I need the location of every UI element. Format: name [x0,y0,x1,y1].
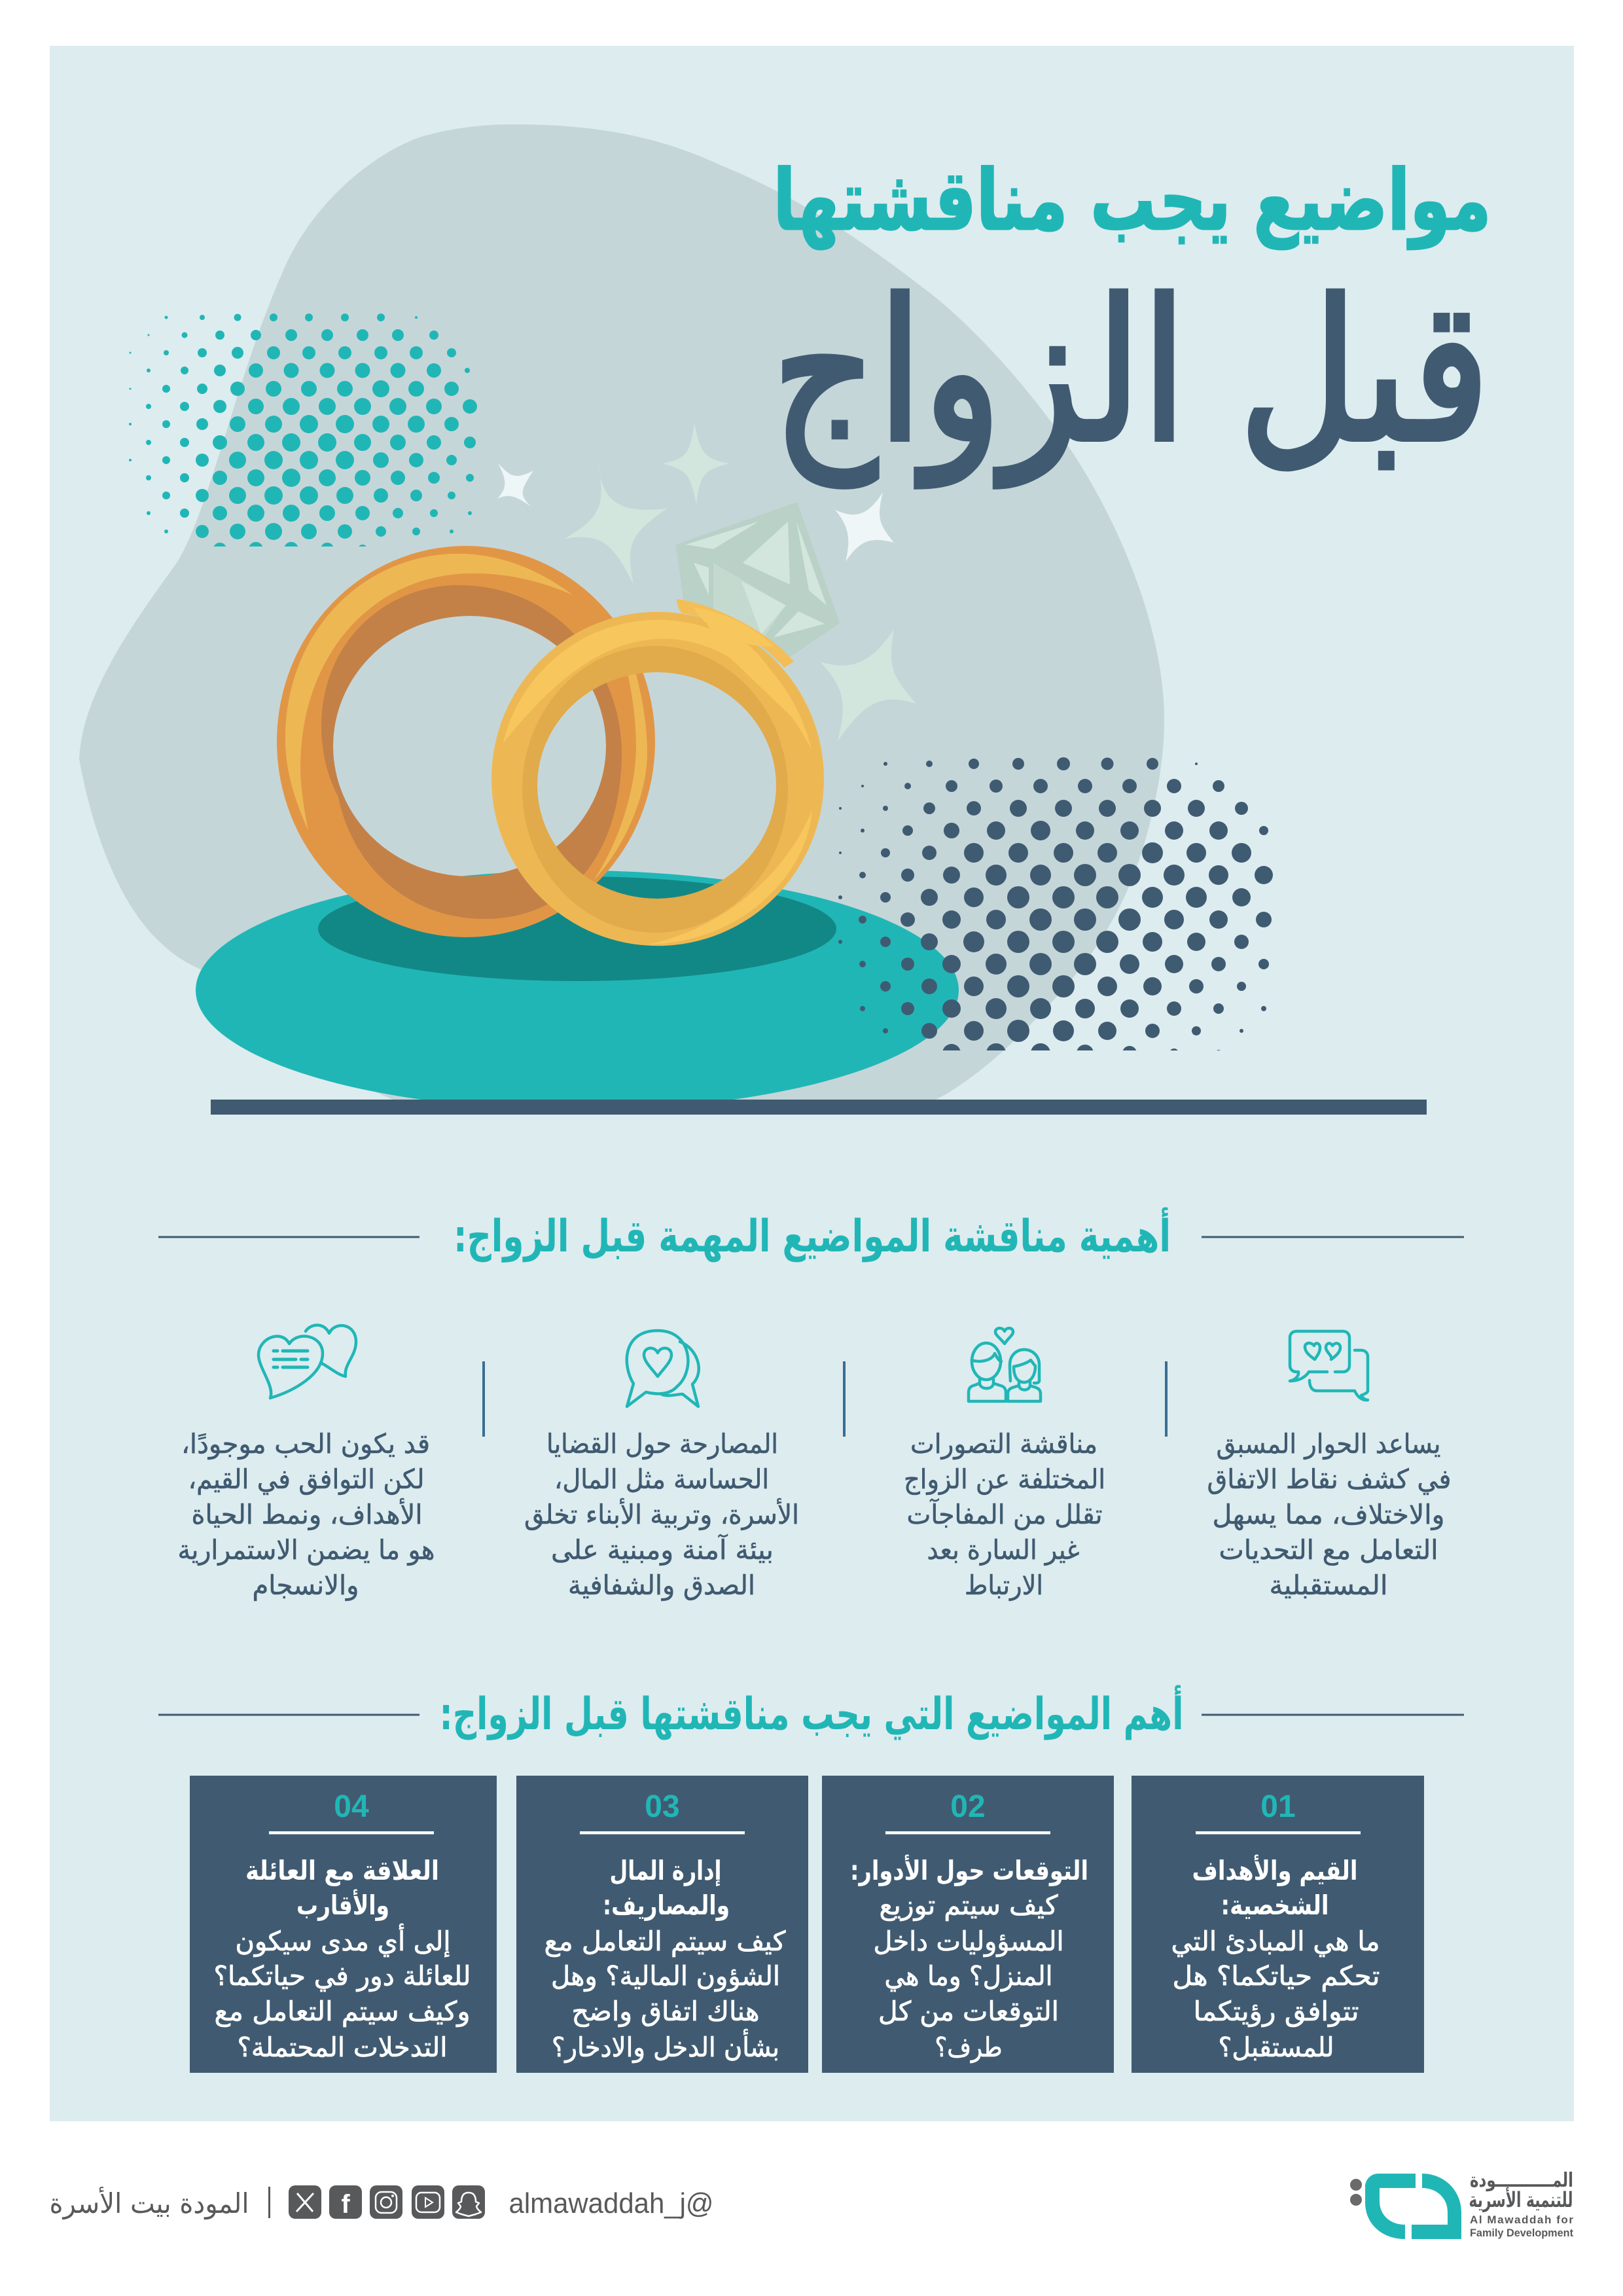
text: الارتباط [965,1570,1043,1601]
card 04: التدخلات المحتملة؟ [237,2032,448,2063]
icon: Facebook: f [341,2190,350,2219]
card 04 [190,1776,497,2073]
background blob [79,124,1164,1100]
logo text: المـــــــــــودة [1470,2169,1573,2192]
text: مناقشة التصورات [910,1428,1097,1460]
diamond [676,502,840,662]
halftone: dark dots [838,757,1273,1063]
card 02: 02 [950,1789,986,1824]
card 01: القيم والأهداف [1192,1854,1357,1887]
dark teal ellipse [318,876,836,981]
star: upper pale green [662,423,730,504]
column: dialogue [1207,1331,1452,1601]
icon: heart speech bubbles [259,1325,356,1398]
title: قبل الزواج [772,259,1489,488]
text [524,1428,799,1601]
logo text [1469,2169,1573,2239]
icon: Facebook [329,2185,362,2219]
orange ring [277,546,655,937]
card 03: بشأن الدخل والادخار؟ [552,2029,779,2063]
text: الصدق والشفافية [568,1570,755,1601]
text: تقلل من المفاجآت [907,1498,1102,1530]
text: المستقبلية [1270,1570,1387,1601]
icon: Snapchat [452,2185,485,2219]
star: right white [835,492,894,562]
logo text: Family Development [1470,2227,1573,2239]
card 01: 01 [1260,1789,1296,1824]
text: التعامل مع التحديات [1219,1534,1438,1566]
card 02: كيف سيتم توزيع [880,1890,1058,1921]
text: والاختلاف، مما يسهل [1212,1499,1445,1530]
icon: Instagram [370,2185,402,2219]
text: المصارحة حول القضايا [546,1428,778,1460]
section heading: importance: أهمية مناقشة المواضيع المهمة قبل الزواج: [454,1207,1171,1263]
card 01: للمستقبل؟ [1219,2032,1334,2063]
card 04: للعائلة دور في حياتكما؟ [213,1960,471,1992]
text: قد يكون الحب موجودًا، [181,1428,430,1460]
text: هو ما يضمن الاستمرارية [178,1534,435,1566]
card 02: المنزل؟ وما هي [885,1960,1052,1992]
teal platform ellipse [196,870,959,1110]
icon: X [289,2185,321,2219]
card 04: العلاقة مع العائلة [245,1855,439,1886]
text: المختلفة عن الزواج [904,1463,1105,1495]
card 02: التوقعات حول الأدوار: [850,1854,1088,1887]
card 03: كيف سيتم التعامل مع [544,1926,786,1957]
card 03: هناك اتفاق واضح [572,1996,759,2027]
text [178,1428,435,1601]
column: love and compatibility [178,1325,435,1601]
card 03: 03 [645,1789,680,1824]
logo text: للتنمية الأسرية [1469,2187,1573,2212]
footer divider [268,2187,270,2218]
text: الأسرة، وتربية الأبناء تخلق [524,1498,799,1530]
logo mark [1350,2174,1461,2239]
card 02: طرف؟ [935,2032,1003,2063]
text: لكن التوافق في القيم، [188,1463,424,1496]
card 03 [516,1776,808,2073]
text: الحساسة مثل المال، [554,1463,769,1495]
section heading: topics: أهم المواضيع التي يجب مناقشتها قبل الزواج: [440,1685,1183,1740]
card 04: والأقارب [296,1888,389,1922]
icon: chat bubbles with hearts [1290,1331,1368,1400]
logo text: Al Mawaddah for [1470,2214,1573,2226]
star: lower pale green [820,630,916,741]
footer slogan: المودة بيت الأسرة [50,2186,249,2219]
text: يساعد الحوار المسبق [1216,1428,1441,1460]
gold ring [491,599,824,946]
card 03: إدارة المال [610,1855,721,1887]
icon: heart in chat bubble [627,1331,699,1407]
halftone: teal dots [129,314,477,556]
card 01 [1132,1776,1424,2073]
card 01: الشخصية: [1221,1890,1329,1921]
text [904,1428,1105,1601]
card 03: الشؤون المالية؟ وهل [551,1960,780,1992]
card 01: تحكم حياتكما؟ هل [1173,1960,1380,1992]
card 04: وكيف سيتم التعامل مع [215,1996,470,2027]
base bar [211,1100,1427,1115]
icon: couple with heart [969,1328,1041,1401]
card 04: 04 [334,1789,369,1824]
column: frankness [524,1331,799,1601]
logo [1350,2169,1573,2239]
card 02: التوقعات من كل [878,1996,1059,2027]
text: الأهداف، ونمط الحياة [191,1498,423,1530]
text [1207,1428,1452,1601]
card 01: ما هي المبادئ التي [1171,1926,1380,1958]
text: في كشف نقاط الاتفاق [1207,1463,1452,1496]
card 03: والمصاريف: [603,1890,730,1922]
title [772,152,1491,488]
text: غير السارة بعد [927,1534,1080,1566]
icon: YouTube [412,2185,444,2219]
star: small white [497,463,533,507]
social handle: almawaddah_j@ [509,2187,713,2219]
card 01: تتوافق رؤيتكما [1194,1996,1359,2027]
dividers [482,1361,1168,1437]
card 04: إلى أي مدى سيكون [236,1924,450,1957]
star: large pale green [565,463,667,584]
text: والانسجام [253,1570,359,1601]
text: بيئة آمنة ومبنية على [551,1534,774,1566]
card 02: المسؤوليات داخل [873,1926,1064,1957]
column: expectations [904,1328,1105,1601]
card 02 [822,1776,1114,2073]
